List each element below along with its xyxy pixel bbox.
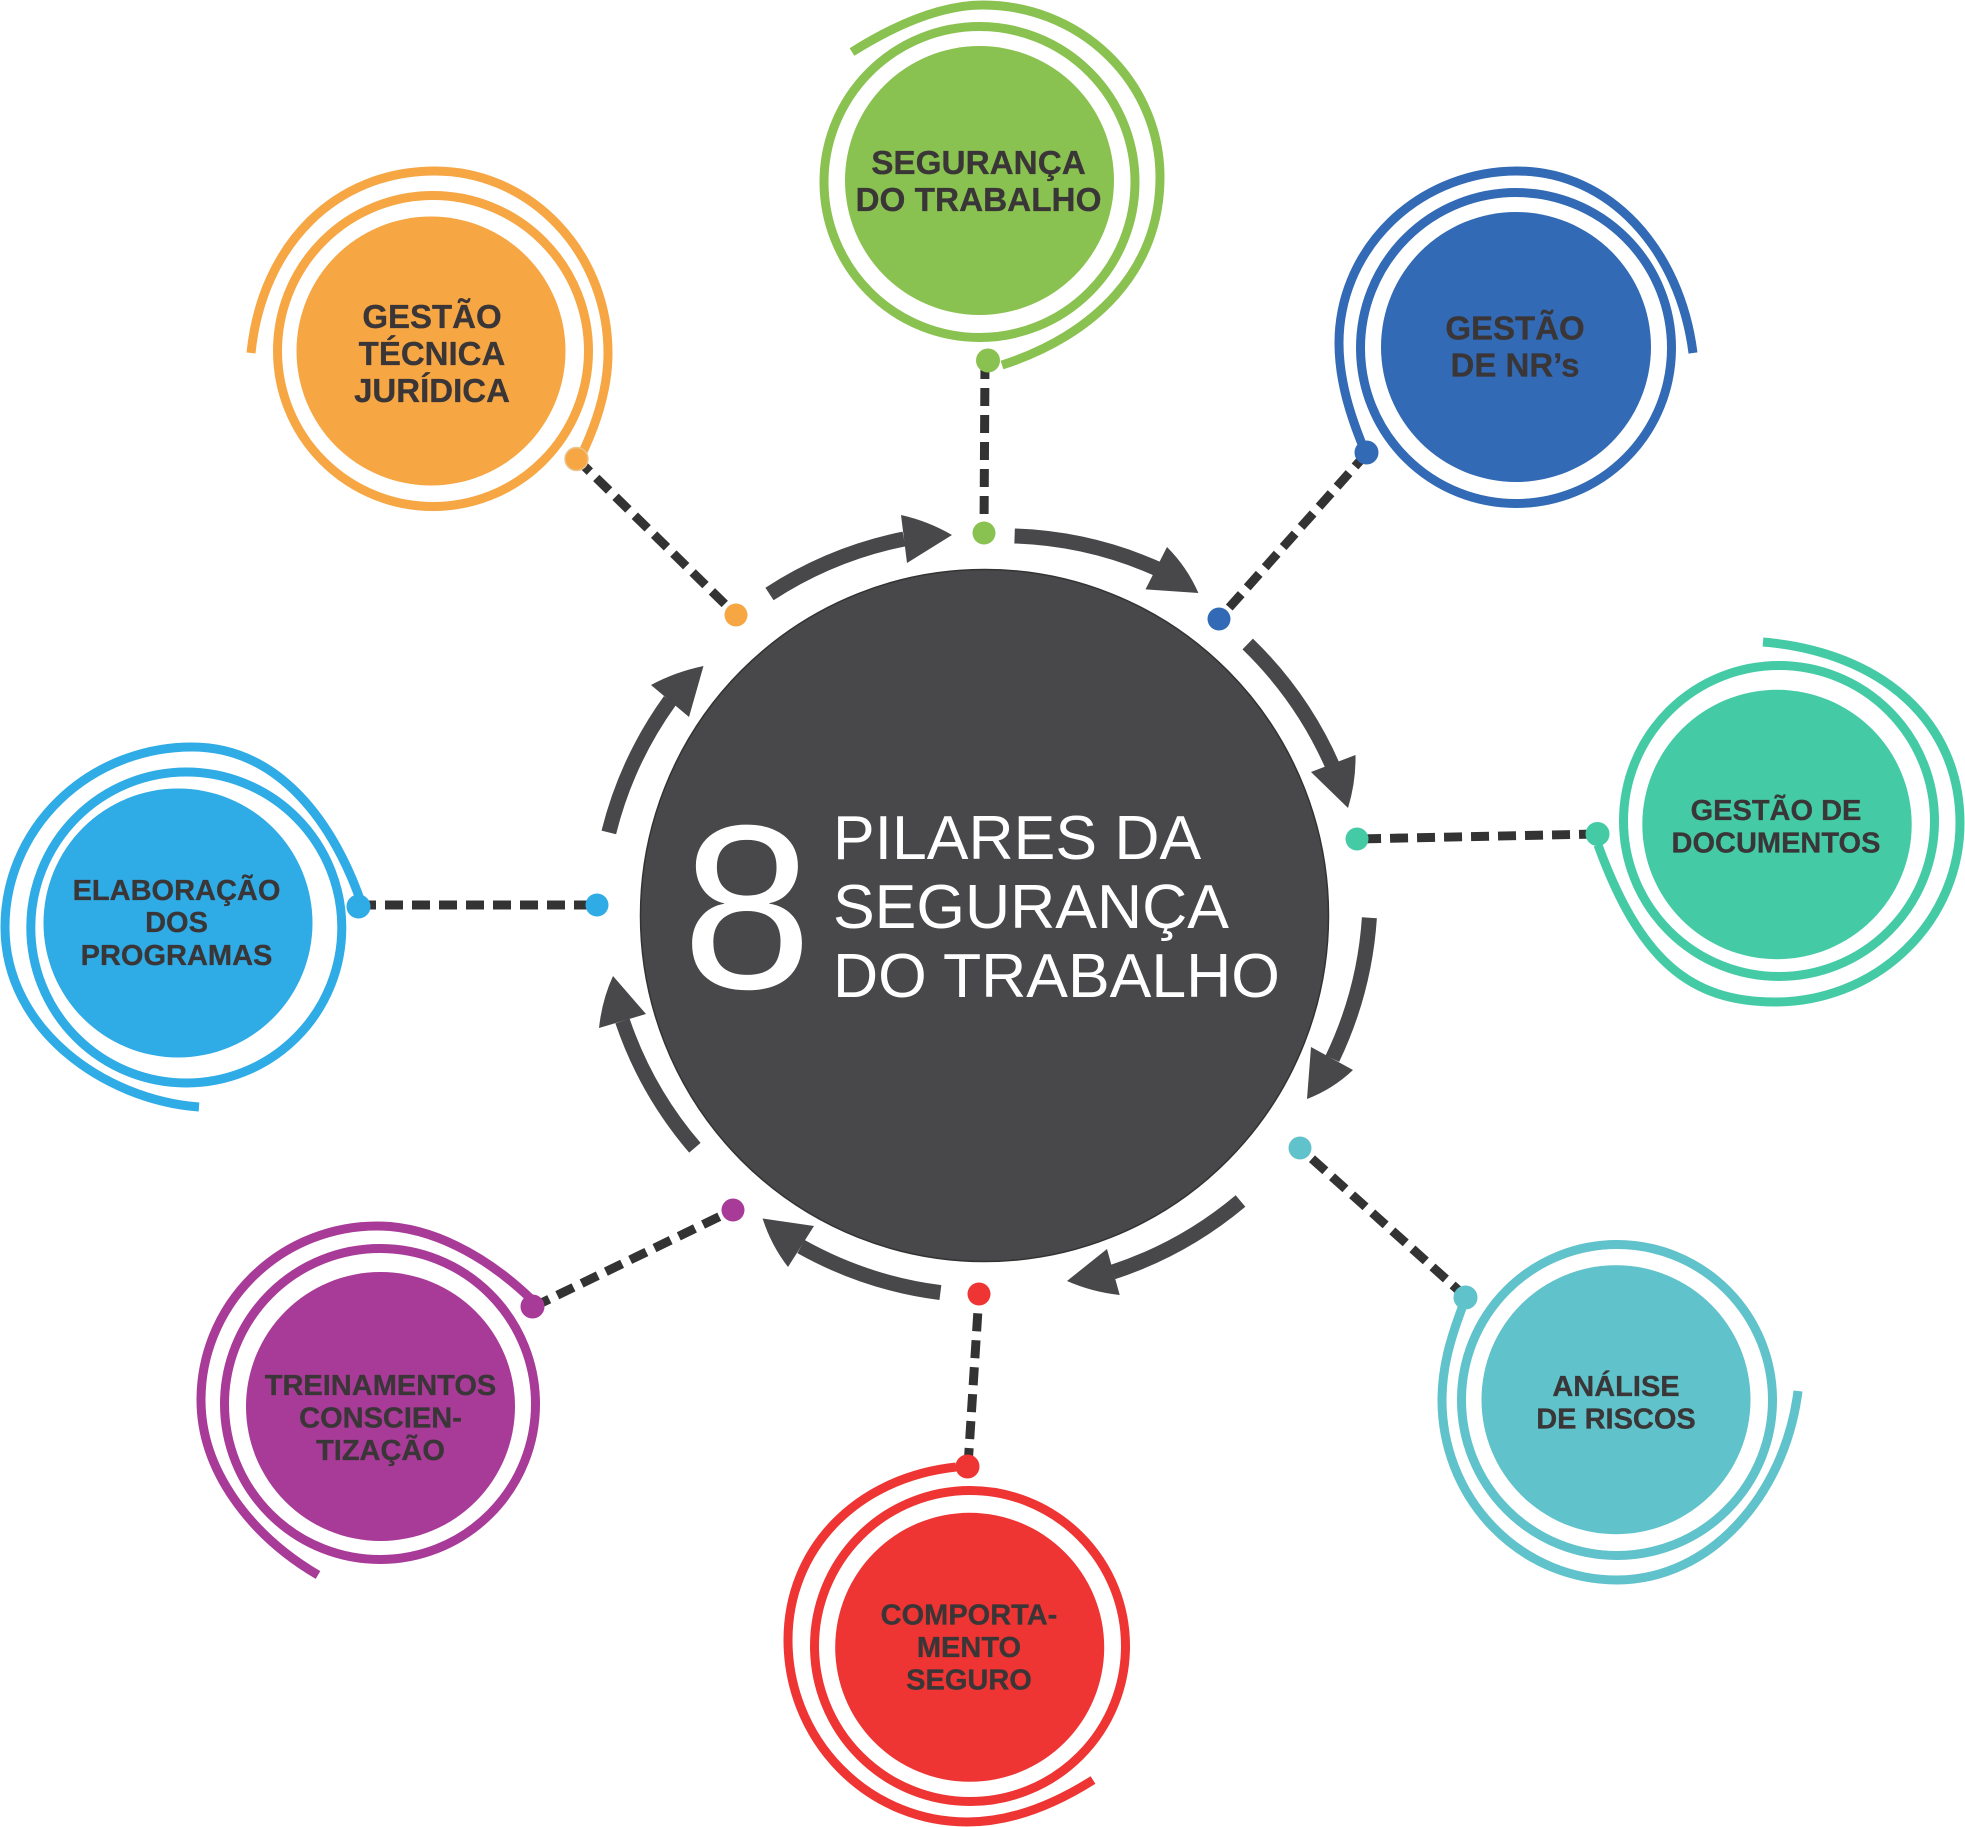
label: CONSCIEN- — [299, 1402, 462, 1434]
arrow 1 — [770, 515, 952, 594]
central title: SEGURANÇA — [833, 872, 1229, 942]
connector: Gestão de NRs — [1208, 453, 1367, 630]
arrow 6 — [763, 1218, 940, 1293]
label: TÉCNICA — [359, 335, 505, 372]
panel: Análise de Riscos — [1442, 1244, 1798, 1580]
label: DOCUMENTOS — [1672, 828, 1880, 860]
central title: DO TRABALHO — [833, 941, 1280, 1011]
panel: Gestão de Documentos — [1586, 642, 1960, 1002]
label: JURÍDICA — [354, 372, 510, 409]
connector: Comportamento Seguro — [968, 1282, 990, 1466]
label: DE RISCOS — [1536, 1404, 1696, 1436]
connector: Análise de Riscos — [1288, 1136, 1466, 1297]
connector: Segurança do Trabalho — [972, 361, 996, 544]
central circle with title — [640, 570, 1328, 1262]
arrow 8 — [609, 666, 704, 832]
big number 8: 8 — [682, 776, 812, 1038]
panel: Treinamentos Conscientização — [201, 1226, 544, 1575]
panel: Gestão de NRs — [1339, 171, 1693, 504]
label: DOS — [145, 907, 208, 939]
arrow 7 — [599, 976, 695, 1148]
label: TREINAMENTOS — [265, 1370, 496, 1402]
label: SEGURANÇA — [871, 145, 1086, 182]
label: DO TRABALHO — [855, 182, 1102, 219]
connector: Gestão Técnica Jurídica — [577, 459, 748, 626]
label: DE NR’s — [1451, 346, 1579, 384]
label: GESTÃO — [1445, 310, 1585, 346]
connector: Elaboração dos Programas — [358, 894, 608, 916]
label: PROGRAMAS — [81, 940, 272, 972]
panel: Elaboração dos Programas — [5, 747, 370, 1107]
label: ELABORAÇÃO — [73, 873, 280, 907]
label: TIZAÇÃO — [316, 1433, 445, 1467]
arrow 3 — [1248, 644, 1356, 808]
central title: PILARES DA — [833, 803, 1202, 873]
connector: Treinamentos — [533, 1198, 744, 1307]
panel: Segurança do Trabalho — [824, 5, 1160, 372]
label: MENTO — [917, 1632, 1021, 1664]
label: GESTÃO DE — [1691, 793, 1861, 827]
arrow 5 — [1067, 1201, 1240, 1295]
panel: Gestão Técnica Jurídica — [251, 171, 608, 506]
connector: Gestão de Documentos — [1346, 828, 1597, 850]
label: GESTÃO — [362, 298, 502, 335]
label: COMPORTA- — [881, 1600, 1057, 1632]
label: ANÁLISE — [1552, 1369, 1680, 1403]
arrow 2 — [1015, 536, 1198, 593]
panel: Comportamento Seguro — [788, 1454, 1126, 1822]
arrow 4 — [1307, 918, 1369, 1099]
label: SEGURO — [906, 1664, 1032, 1696]
